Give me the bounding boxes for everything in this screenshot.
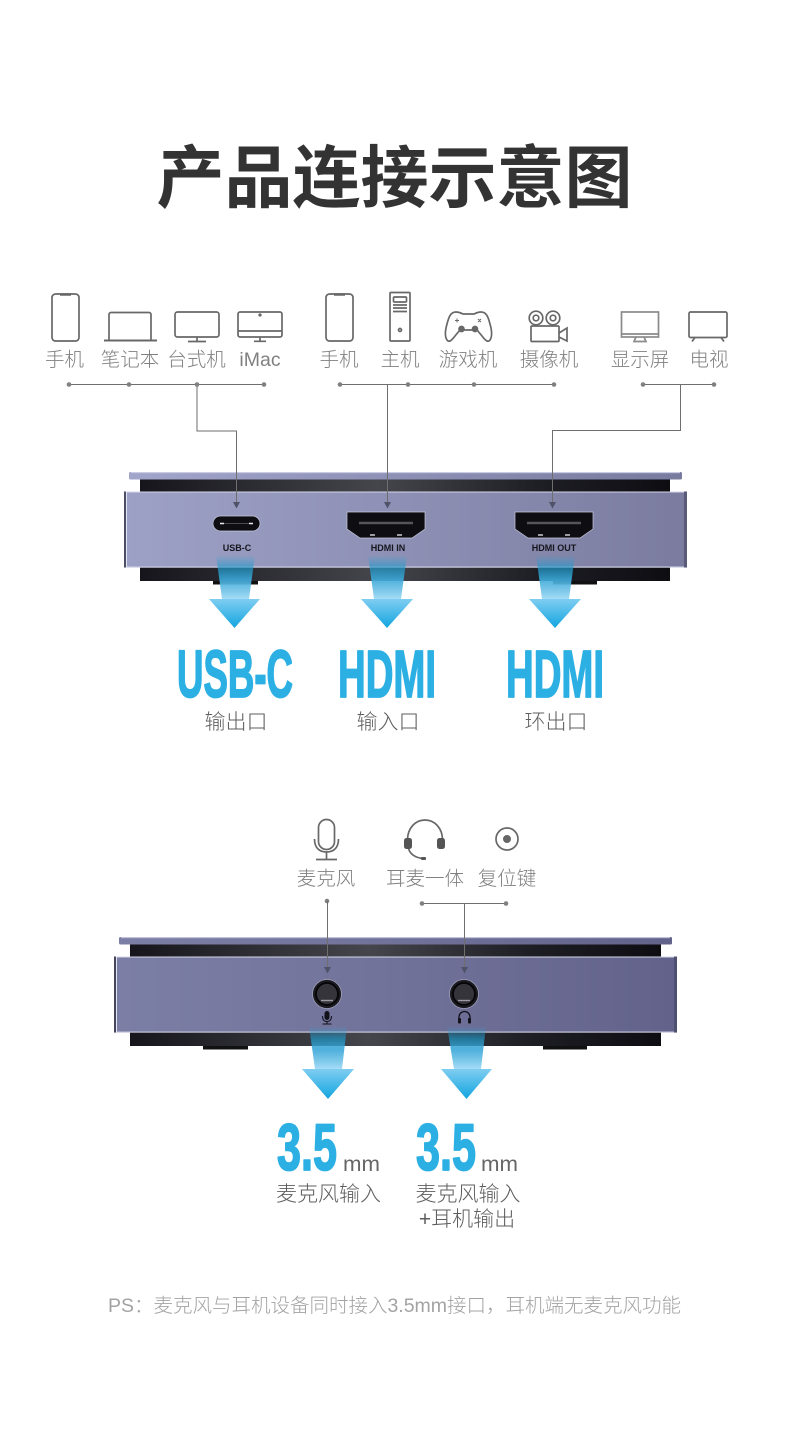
arrow: USB-C — [209, 555, 260, 628]
caption: 3.5mm mic input + headphone output: 3.5 — [416, 1110, 476, 1184]
caption: USB-C output: 输出口 — [204, 711, 268, 734]
device: front panel — [114, 937, 677, 1050]
port: HDMI IN — [347, 512, 425, 553]
connector: HDMI OUT — [549, 382, 716, 508]
caption: 3.5mm mic input + headphone output: +耳机输出 — [419, 1208, 515, 1231]
footnote: PS：麦克风与耳机设备同时接入3.5mm接口，耳机端无麦克风功能 — [108, 1295, 681, 1317]
caption: HDMI loop out: HDMI — [506, 637, 604, 712]
connector: USB-C — [67, 382, 266, 508]
caption: HDMI input: HDMI — [338, 637, 436, 712]
caption: HDMI loop out: 环出口 — [524, 711, 588, 734]
labels: 显示屏 — [611, 349, 669, 371]
labels: 台式机 — [167, 349, 226, 371]
port: USB-C — [213, 516, 260, 553]
caption: 3.5mm mic input — [276, 1110, 381, 1206]
icon: phone — [326, 294, 353, 341]
labels — [611, 349, 729, 371]
title: 产品连接示意图 — [156, 141, 632, 217]
caption: USB-C output — [177, 637, 293, 734]
labels — [319, 349, 578, 371]
icon: microphone — [314, 820, 338, 860]
labels: 主机 — [380, 349, 420, 371]
connector: headset — [420, 901, 508, 974]
connector: HDMI IN — [338, 382, 556, 508]
icon: desktop — [175, 312, 219, 342]
device: rear panel — [124, 472, 687, 584]
caption: HDMI loop out — [506, 637, 604, 734]
icon: display — [622, 312, 658, 342]
port: HDMI OUT: HDMI OUT — [532, 543, 577, 553]
labels — [297, 868, 536, 890]
group: HDMI out target devices — [611, 312, 729, 371]
icon: headset — [404, 820, 445, 860]
caption: 3.5mm mic input: 3.5 — [277, 1110, 337, 1184]
arrow: headphone jack — [441, 1026, 492, 1099]
caption: 3.5mm mic input: mm — [343, 1153, 380, 1176]
icon: laptop — [104, 312, 157, 340]
labels: 麦克风 — [297, 868, 355, 890]
labels: 笔记本 — [101, 349, 159, 371]
icon: video camera — [529, 311, 567, 342]
caption: HDMI input: 输入口 — [356, 711, 420, 734]
caption: 3.5mm mic input + headphone output: 麦克风输入 — [416, 1183, 520, 1206]
labels: 游戏机 — [439, 349, 497, 371]
labels: 耳麦一体 — [386, 868, 464, 890]
icon: TV — [689, 312, 727, 342]
icon: iMac — [238, 312, 282, 341]
port: headphone jack — [450, 980, 478, 1008]
labels: 手机 — [45, 349, 84, 371]
labels: 复位键 — [478, 868, 536, 890]
port: HDMI OUT — [515, 512, 593, 553]
labels: iMac — [239, 349, 281, 371]
caption: USB-C output: USB-C — [177, 637, 293, 712]
caption: 3.5mm mic input: 麦克风输入 — [276, 1183, 381, 1206]
icon: headphone engraving — [458, 1012, 471, 1024]
icon: reset button — [496, 828, 518, 850]
icon: host tower — [390, 292, 410, 341]
labels: 电视 — [689, 349, 729, 371]
group: audio peripherals — [297, 820, 536, 890]
caption: 3.5mm mic input + headphone output — [416, 1110, 520, 1231]
arrow: HDMI OUT — [529, 555, 581, 628]
icon: phone — [52, 294, 79, 341]
icon: mic engraving — [322, 1011, 332, 1024]
port: HDMI IN: HDMI IN — [371, 543, 405, 553]
labels — [45, 349, 281, 371]
group: USB-C source devices — [45, 294, 282, 371]
connector: microphone — [324, 899, 331, 974]
arrow: HDMI IN — [361, 555, 413, 628]
port: USB-C: USB-C — [223, 543, 252, 553]
group: HDMI in source devices — [319, 292, 578, 371]
labels: 手机 — [319, 349, 359, 371]
arrow: mic jack — [302, 1026, 354, 1099]
icon: game controller — [446, 312, 492, 341]
caption: 3.5mm mic input + headphone output: mm — [481, 1153, 518, 1176]
port: microphone jack — [312, 980, 342, 1008]
caption: HDMI input — [338, 637, 436, 734]
labels: 摄像机 — [520, 349, 578, 371]
